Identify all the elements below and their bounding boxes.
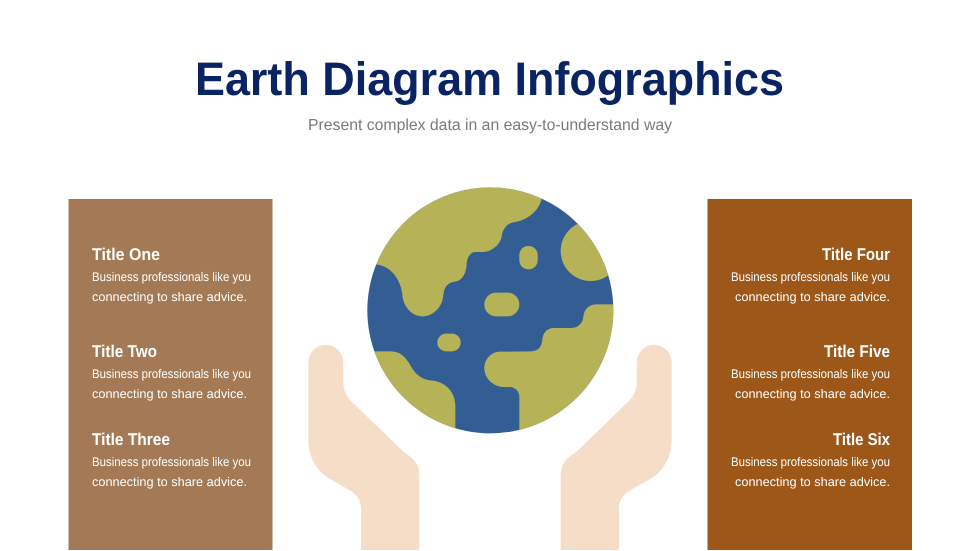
text block: title six: Title Six xyxy=(833,430,890,449)
icon: right hand xyxy=(561,345,672,550)
text block: title four: connecting to share advice. xyxy=(735,290,890,304)
text block: title one: connecting to share advice. xyxy=(92,290,247,304)
text block: title six: Business professionals like you xyxy=(731,455,890,469)
text block: title three: connecting to share advice. xyxy=(92,475,247,489)
panel: left titles one to three xyxy=(68,199,272,550)
text block: title one: Title One xyxy=(92,245,160,264)
text block: title five: Business professionals like you xyxy=(731,367,890,381)
text block: title four: Business professionals like you xyxy=(731,270,890,284)
text block: title four: Title Four xyxy=(822,245,890,264)
text block: title five: Title Five xyxy=(824,342,890,361)
icon: earth globe xyxy=(367,187,614,434)
text block: title two: connecting to share advice. xyxy=(92,387,247,401)
text block: title one: Business professionals like you xyxy=(92,270,251,284)
title: Earth Diagram Infographics xyxy=(195,52,784,105)
text block: title two: Business professionals like you xyxy=(92,367,251,381)
text block: title five xyxy=(731,342,890,401)
text block: title two: Title Two xyxy=(92,342,157,361)
text block: title four xyxy=(731,245,890,304)
text block: title six xyxy=(731,430,890,489)
panel: right titles four to six xyxy=(708,199,912,550)
text block: title five: connecting to share advice. xyxy=(735,387,890,401)
icon: left hand xyxy=(308,345,419,550)
text block: title three: Title Three xyxy=(92,430,170,449)
text block: title three xyxy=(92,430,251,489)
text block: title two xyxy=(92,342,251,401)
subtitle: Present complex data in an easy-to-understand way xyxy=(308,117,672,134)
text block: title one xyxy=(92,245,251,304)
text block: title three: Business professionals like you xyxy=(92,455,251,469)
text block: title six: connecting to share advice. xyxy=(735,475,890,489)
